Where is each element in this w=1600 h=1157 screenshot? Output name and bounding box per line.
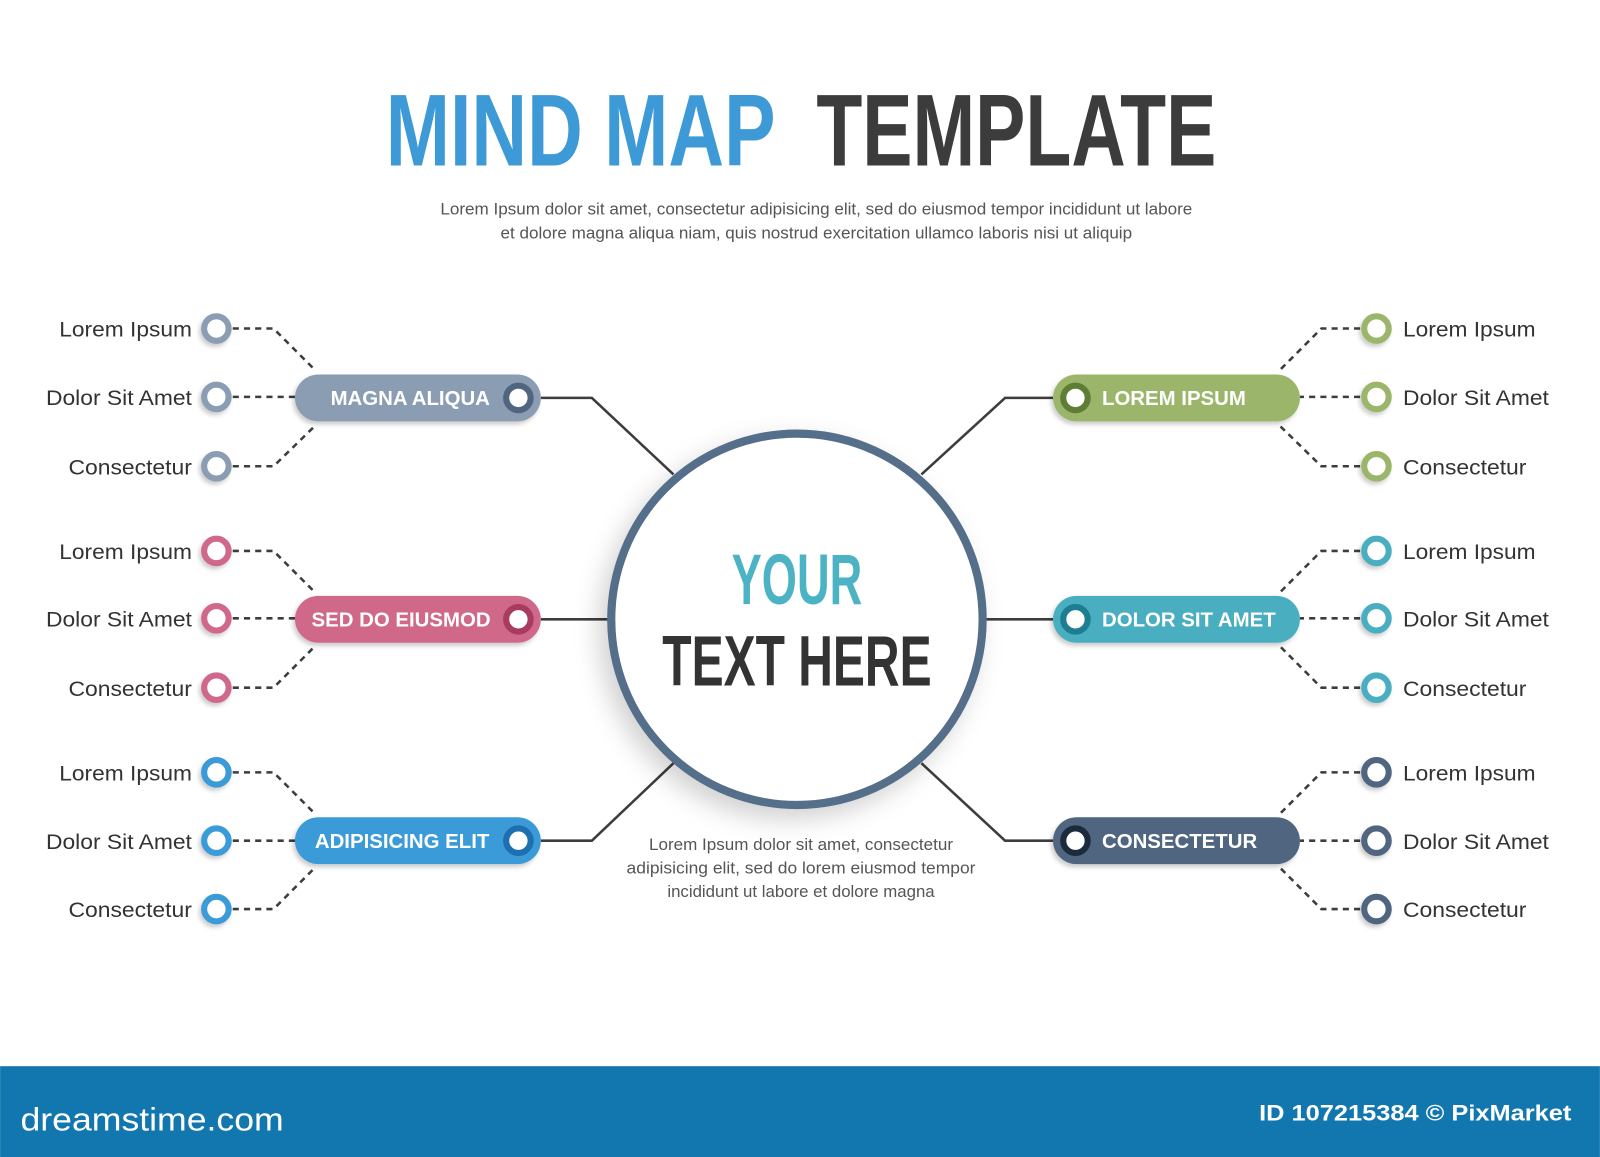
leaf labels right: Dolor Sit Amet bbox=[1403, 386, 1549, 410]
title: TEMPLATE bbox=[816, 73, 1216, 187]
subtitle bbox=[440, 200, 1192, 243]
pill: dolor sit amet bbox=[1053, 596, 1300, 643]
bottom description: Lorem Ipsum dolor sit amet, consectetur bbox=[649, 836, 954, 854]
title bbox=[386, 73, 1216, 187]
bottom description: incididunt ut labore et dolore magna bbox=[667, 883, 936, 901]
leaf labels right: Consectetur bbox=[1403, 898, 1526, 922]
subtitle: et dolore magna aliqua niam, quis nostrud exercitation ullamco laboris nisi ut aliquip bbox=[501, 225, 1132, 243]
pill: consectetur: CONSECTETUR bbox=[1102, 831, 1257, 853]
bottom description: adipisicing elit, sed do lorem eiusmod tempor bbox=[627, 859, 976, 877]
central circle: TEXT HERE bbox=[662, 622, 932, 702]
leaf labels left: Consectetur bbox=[68, 677, 192, 701]
leaf labels right: Lorem Ipsum bbox=[1403, 318, 1536, 342]
leaf nodes left bbox=[204, 316, 229, 921]
leaf labels left: Consectetur bbox=[68, 898, 192, 922]
pill: adipisicing elit bbox=[295, 817, 541, 864]
connectors bbox=[541, 398, 1053, 841]
pill: sed do eiusmod bbox=[295, 596, 541, 643]
central circle bbox=[611, 434, 983, 805]
central circle: YOUR bbox=[732, 540, 862, 620]
leaf labels right: Consectetur bbox=[1403, 677, 1526, 701]
leaf labels right: Lorem Ipsum bbox=[1403, 540, 1536, 564]
bottom description bbox=[627, 836, 976, 901]
subtitle: Lorem Ipsum dolor sit amet, consectetur adipisicing elit, sed do eiusmod tempor incididunt ut labore bbox=[440, 200, 1192, 218]
leaf labels left: Lorem Ipsum bbox=[59, 540, 192, 564]
footer band: ID 107215384 © PixMarket bbox=[1259, 1100, 1572, 1125]
leaf labels left: Dolor Sit Amet bbox=[46, 386, 192, 410]
pill: adipisicing elit: ADIPISICING ELIT bbox=[315, 831, 490, 853]
pill: sed do eiusmod: SED DO EIUSMOD bbox=[312, 609, 491, 631]
pill: lorem ipsum bbox=[1053, 374, 1300, 421]
leaf labels right: Dolor Sit Amet bbox=[1403, 830, 1549, 854]
leaf nodes right bbox=[1364, 316, 1389, 921]
leaf labels left bbox=[46, 318, 192, 922]
leaf labels right bbox=[1403, 318, 1549, 922]
pill: dolor sit amet: DOLOR SIT AMET bbox=[1102, 609, 1276, 631]
pill: lorem ipsum: LOREM IPSUM bbox=[1102, 388, 1246, 410]
leaf labels right: Lorem Ipsum bbox=[1403, 762, 1536, 786]
title: MIND MAP bbox=[386, 73, 776, 187]
pill: magna aliqua: MAGNA ALIQUA bbox=[331, 388, 490, 410]
leaf labels left: Dolor Sit Amet bbox=[46, 607, 192, 631]
dashed leaf connectors bbox=[233, 329, 1360, 909]
footer band: dreamstime.com bbox=[21, 1100, 284, 1137]
leaf labels left: Consectetur bbox=[68, 455, 192, 479]
leaf labels left: Lorem Ipsum bbox=[59, 318, 192, 342]
leaf labels right: Dolor Sit Amet bbox=[1403, 607, 1549, 631]
leaf labels right: Consectetur bbox=[1403, 455, 1526, 479]
leaf labels left: Dolor Sit Amet bbox=[46, 830, 192, 854]
pill: magna aliqua bbox=[295, 374, 541, 421]
leaf labels left: Lorem Ipsum bbox=[59, 762, 192, 786]
pill: consectetur bbox=[1053, 817, 1300, 864]
footer band bbox=[0, 1066, 1600, 1157]
